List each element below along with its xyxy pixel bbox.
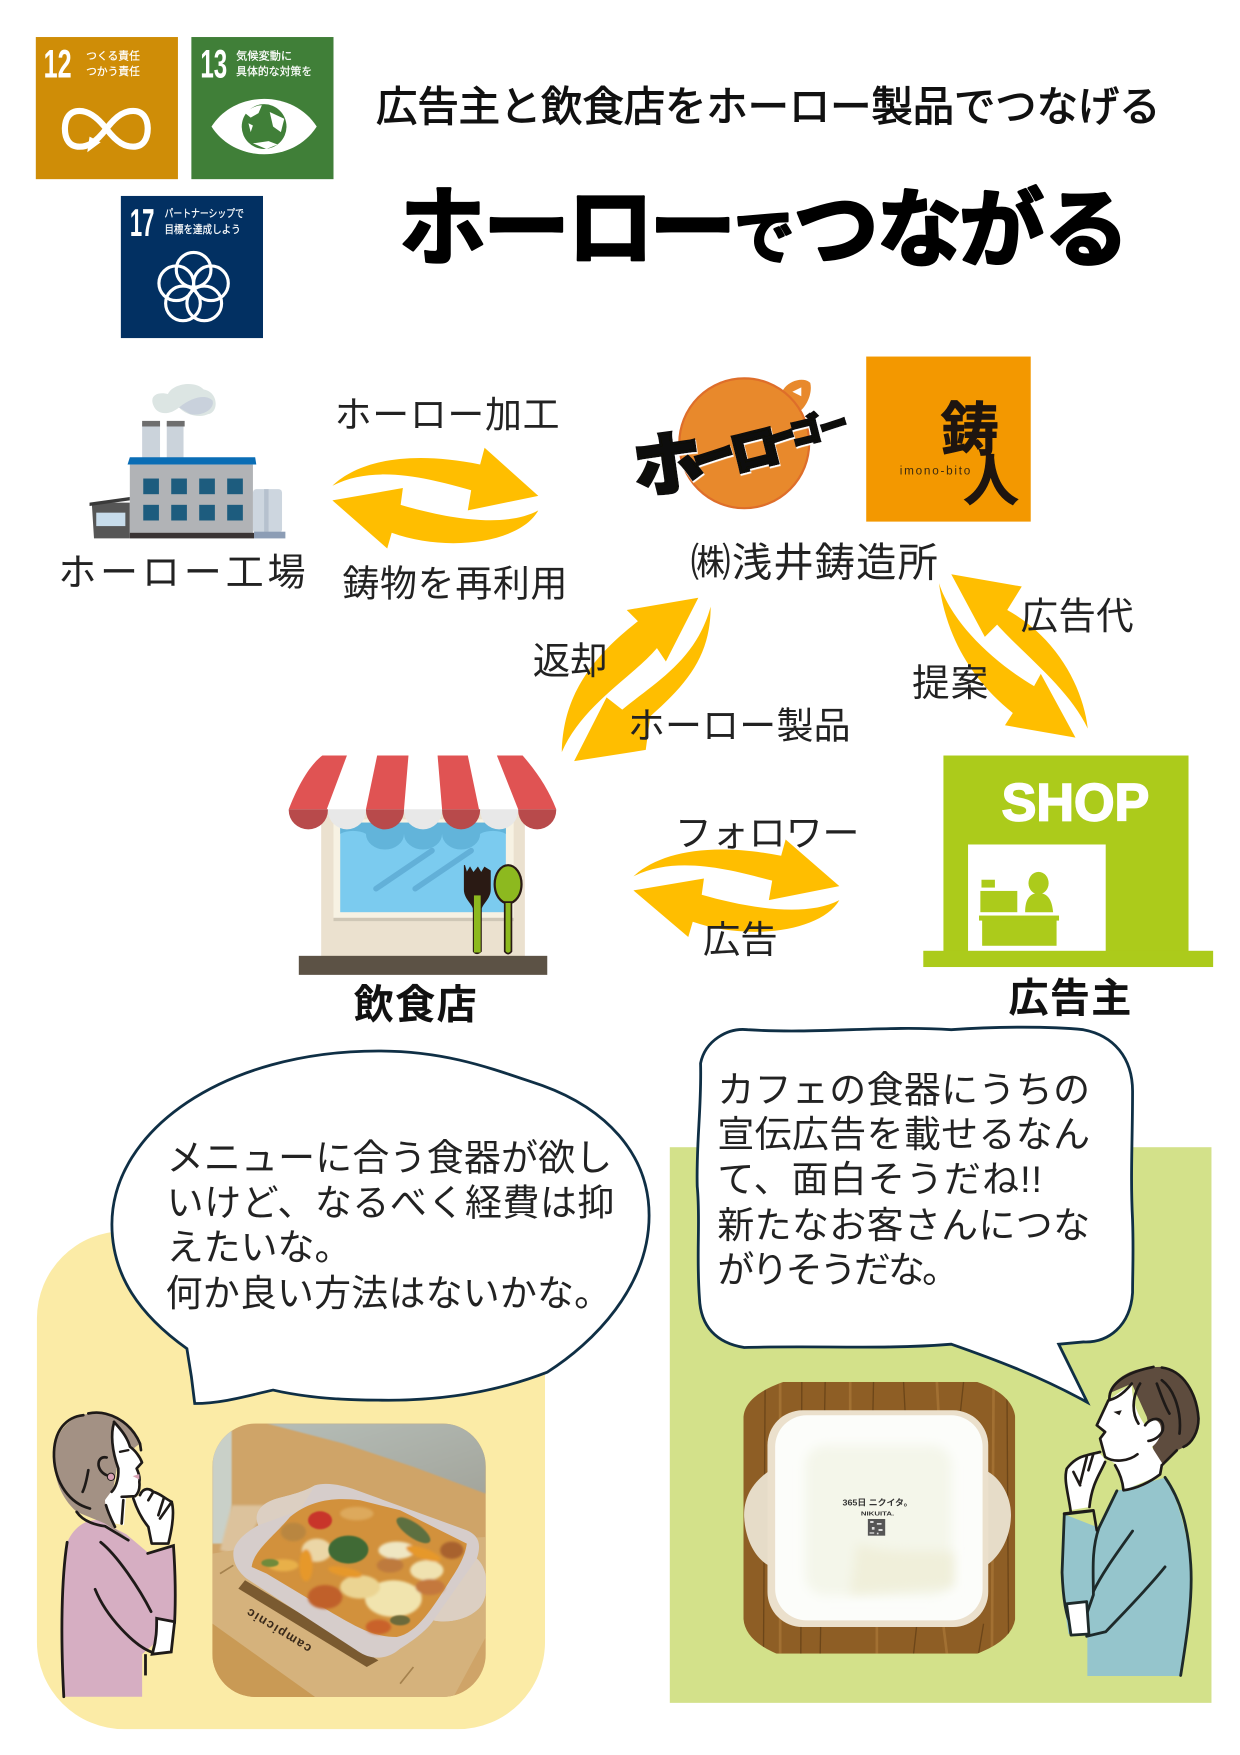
speech bubble: advertiser: て、面白そうだね!!	[717, 1159, 1042, 1200]
label: advertisement: 広告	[703, 918, 778, 960]
label: ad fee: 広告代	[1021, 595, 1134, 637]
SDG icon 13: 気候変動に	[236, 48, 292, 62]
label: advertiser: 広告主	[1008, 976, 1131, 1021]
speech bubble: advertiser: 宣伝広告を載せるなん	[717, 1114, 1090, 1155]
main title: で	[734, 204, 795, 272]
logo: horo-go: ー	[758, 417, 801, 462]
label: enamel processing: ホーロー加工	[335, 395, 560, 436]
label: restaurant: 飲食店	[354, 983, 477, 1028]
speech bubble: restaurant: えたいな。	[167, 1227, 351, 1268]
photo: gratin in enamel dish: campicnic	[244, 1605, 314, 1656]
icon: factory	[90, 384, 285, 538]
label: proposal: 提案	[912, 662, 988, 704]
photo: advertising enamel dish	[743, 1382, 1015, 1654]
label: reuse castings: 鋳物を再利用	[342, 564, 567, 605]
speech bubble: advertiser: がりそうだな。	[717, 1250, 959, 1291]
SDG icon 17: パートナーシップで	[165, 208, 244, 220]
speech bubble: advertiser	[697, 1027, 1133, 1402]
speech bubble: restaurant	[112, 1051, 649, 1403]
SDG icon 13	[191, 37, 334, 179]
logo: imono-bito: 人	[963, 449, 1019, 512]
SDG icon 13: 具体的な対策を	[236, 64, 312, 78]
speech bubble: restaurant: メニューに合う食器が欲し	[167, 1138, 612, 1179]
label: followers: フォロワー	[675, 813, 859, 854]
label: Asai foundry: ㈱浅井鋳造所	[691, 540, 938, 585]
SDG icon 12	[36, 37, 178, 179]
arrows: foundry and advertiser exchange	[939, 574, 1088, 738]
speech bubble: advertiser: 新たなお客さんにつな	[717, 1205, 1090, 1246]
SDG icon 12: 12	[44, 41, 72, 86]
logo: imono-bito: 鋳	[941, 398, 999, 463]
panel: restaurant scene background	[37, 1231, 545, 1729]
logo: horo-go: ー	[687, 429, 742, 487]
icon: shop: SHOP	[1002, 773, 1149, 832]
logo: imono-bito: imono-bito	[900, 465, 971, 478]
SDG icon 12: つかう責任	[86, 65, 140, 78]
SDG icon 13: 13	[200, 41, 227, 86]
photo: advertising enamel dish: NIKUITA.	[861, 1511, 895, 1517]
main title	[399, 181, 1129, 279]
label: return: 返却	[533, 640, 608, 682]
arrows: restaurant and advertiser exchange	[633, 840, 839, 937]
main title: つながる	[793, 184, 1129, 279]
photo: advertising enamel dish: 365日 ニクイタ。	[843, 1497, 913, 1508]
logo: imono-bito	[866, 357, 1031, 522]
logo: horo-go: ホ	[629, 422, 708, 509]
arrows: foundry and restaurant exchange	[562, 598, 711, 761]
speech bubble: advertiser: カフェの食器にうちの	[717, 1069, 1090, 1110]
photo: gratin in enamel dish	[212, 1424, 487, 1697]
SDG icon 17: 17	[130, 202, 154, 245]
illustration: thinking woman	[54, 1413, 175, 1697]
logo: horo-go	[629, 378, 852, 509]
icon: shop	[923, 756, 1213, 967]
main title: ホーロー	[399, 181, 736, 278]
SDG icon 17	[121, 196, 263, 338]
label: enamel products: ホーロー製品	[628, 706, 851, 747]
logo: horo-go: ロ	[725, 418, 786, 483]
SDG icon 17: 目標を達成しよう	[165, 223, 241, 236]
icon: restaurant	[289, 756, 556, 975]
logo: horo-go: ゴ	[786, 410, 825, 452]
SDG icon 12: つくる責任	[86, 49, 140, 62]
arrows: factory and foundry exchange	[332, 448, 538, 548]
speech bubble: restaurant: 何か良い方法はないかな。	[166, 1273, 611, 1314]
label: enamel factory: ホーロー工場	[58, 552, 306, 594]
speech bubble: restaurant: いけど、なるべく経費は抑	[167, 1182, 614, 1223]
logo: horo-go: ー	[816, 407, 852, 445]
subtitle: 広告主と飲食店をホーロー製品でつなげる	[376, 84, 1161, 130]
panel: advertiser scene background	[670, 1147, 1211, 1703]
illustration: thinking man	[1062, 1367, 1198, 1676]
